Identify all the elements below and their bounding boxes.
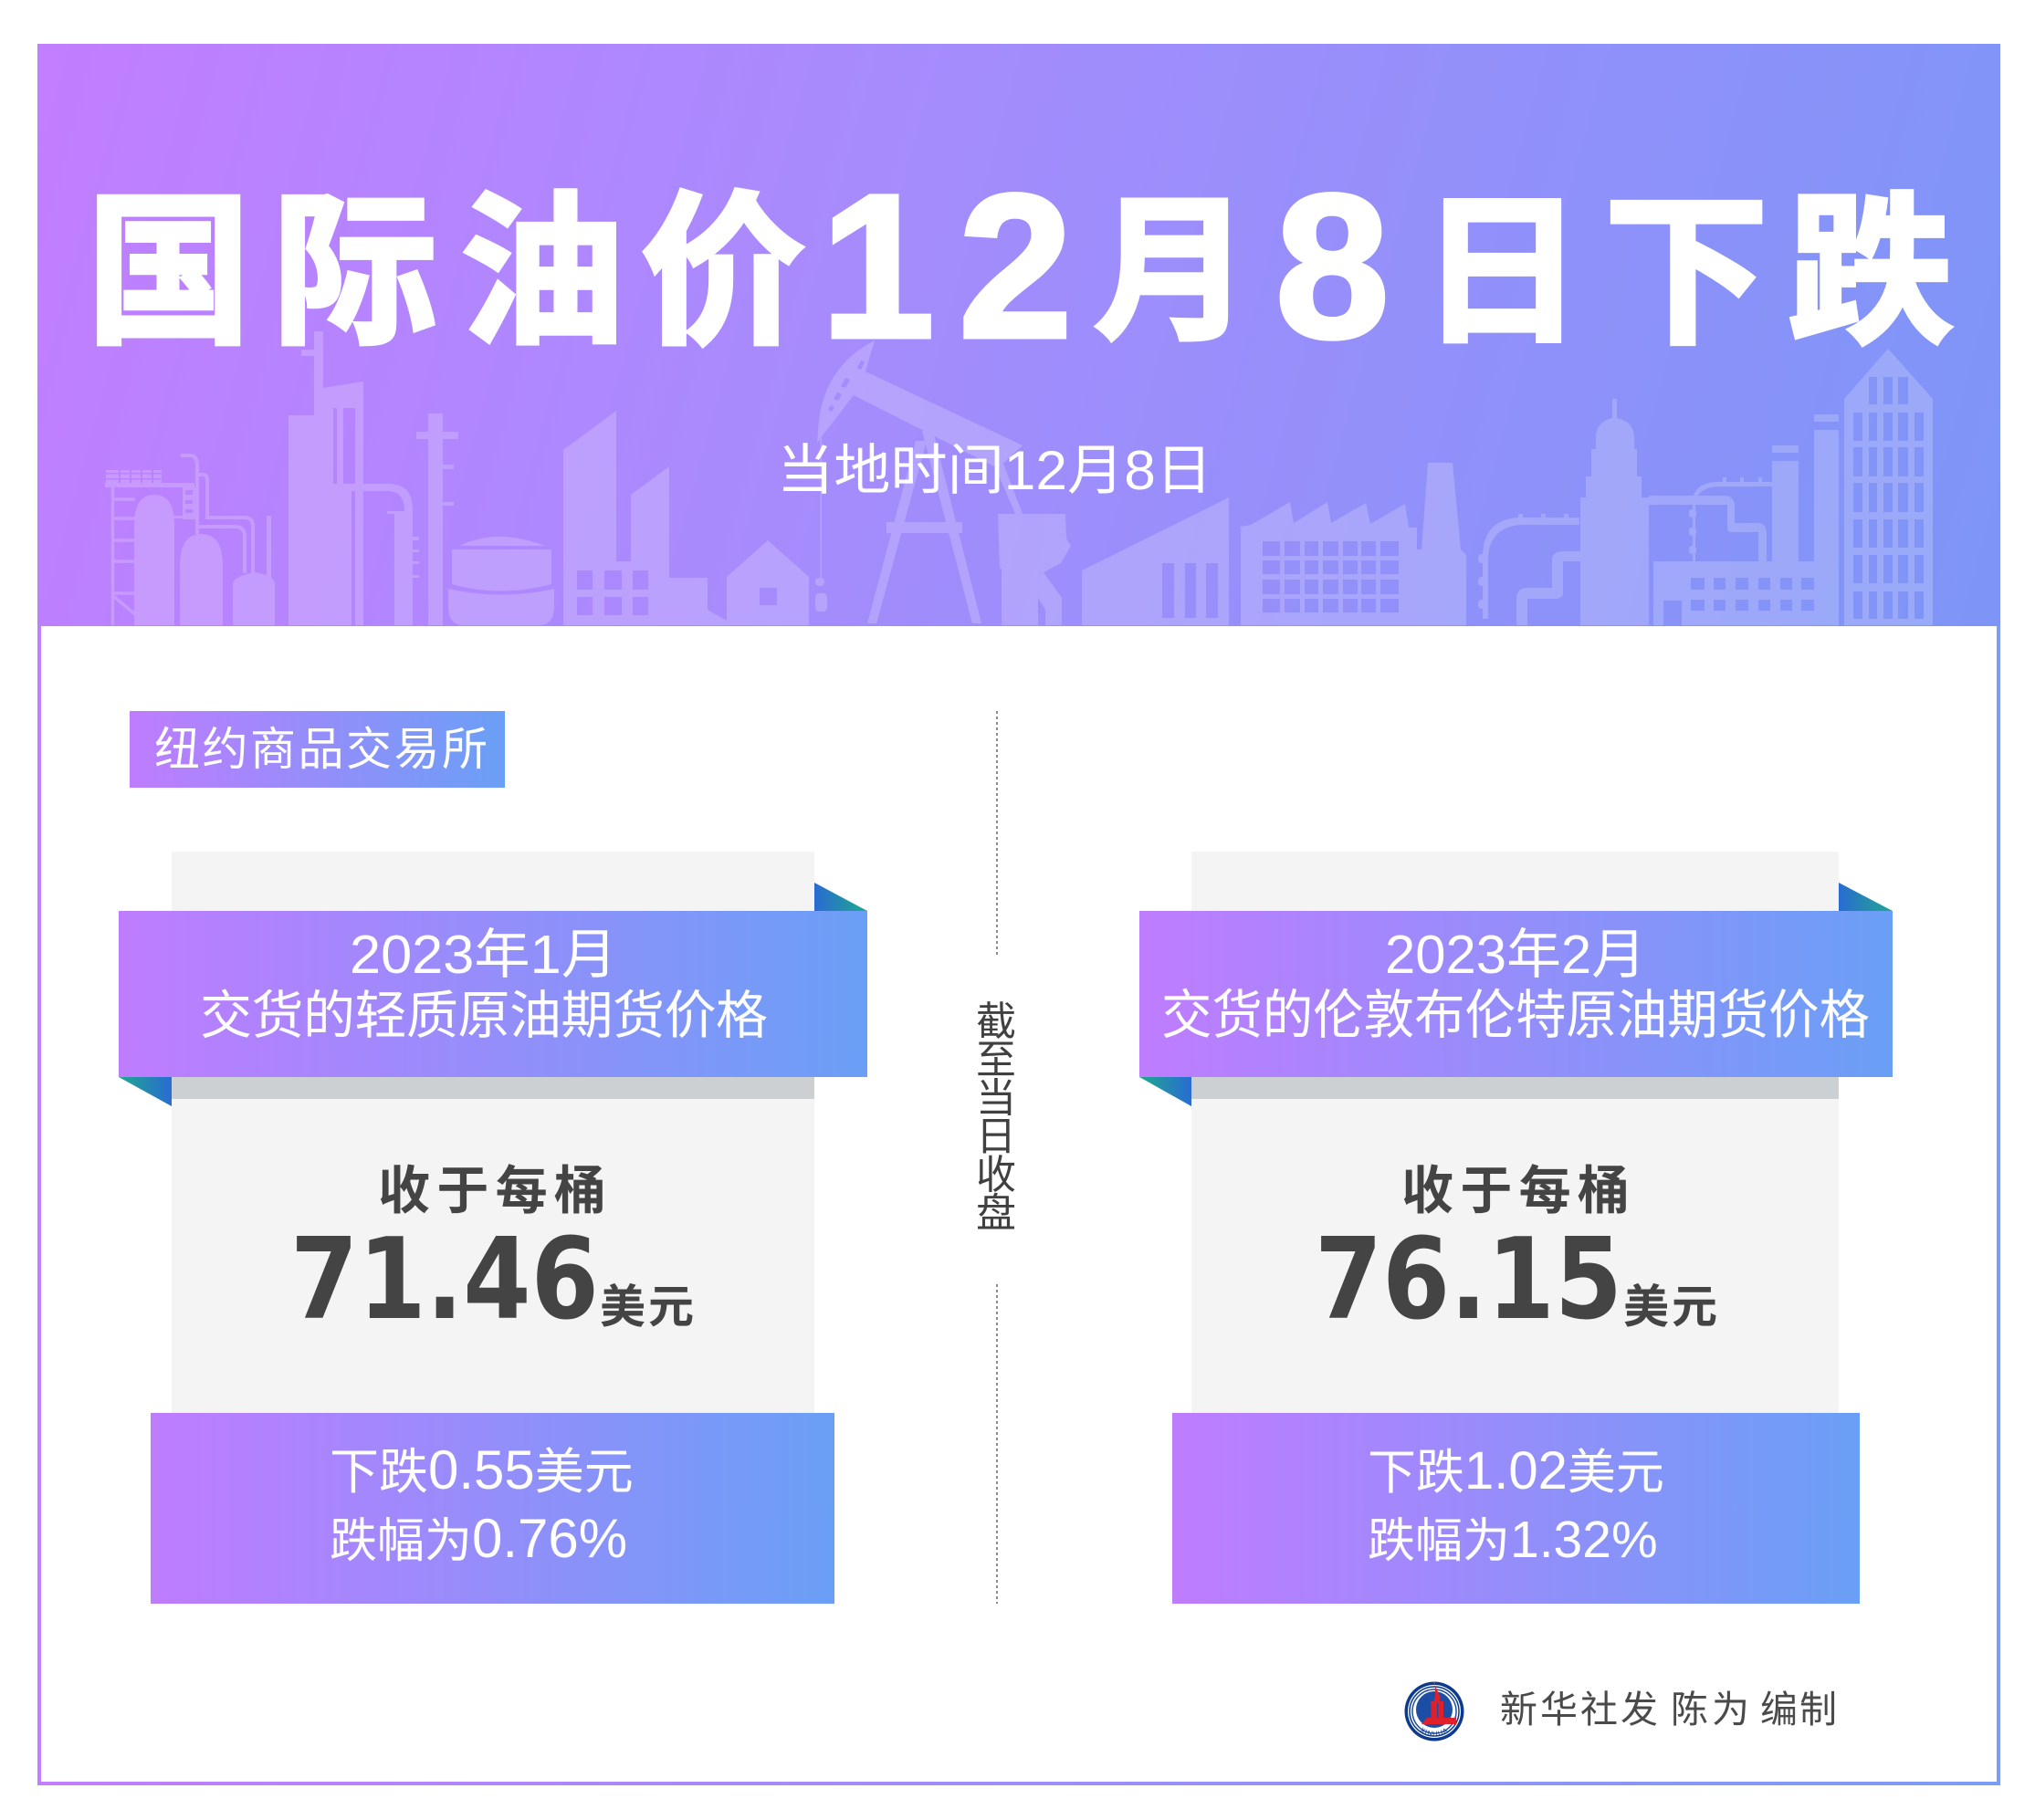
- ribbon heading: 交货的伦敦布伦特原油期货价格: [1161, 972, 1870, 1049]
- main title: 跌: [1788, 139, 1953, 377]
- industrial skyline silhouette: [105, 331, 1933, 625]
- price value: 71.46: [290, 1215, 599, 1345]
- price label: 收于每桶: [378, 1149, 606, 1224]
- price unit: 美元: [1623, 1271, 1717, 1336]
- change box: 跌幅为1.32%: [1368, 1511, 1658, 1569]
- main title: 2: [959, 152, 1073, 381]
- ribbon fold bottom left: [1139, 1077, 1191, 1106]
- panel: Brent crude: [1139, 852, 1893, 1604]
- main title: 日: [1421, 141, 1583, 376]
- main title: 下: [1604, 139, 1768, 377]
- change box: 下跌0.55美元: [330, 1439, 634, 1501]
- main title: 国: [87, 139, 251, 377]
- ribbon fold top right: [1839, 883, 1893, 911]
- main title: 1: [821, 152, 935, 381]
- ribbon fold top right: [814, 883, 867, 911]
- vertical label: 截至当日收盘: [976, 988, 1016, 1239]
- change box: 跌幅为0.76%: [330, 1508, 627, 1569]
- main title: 月: [1094, 143, 1251, 371]
- ribbon heading: 2023年1月: [350, 925, 617, 985]
- price unit: 美元: [600, 1271, 694, 1336]
- price label: 收于每桶: [1401, 1149, 1630, 1224]
- main title: 价: [641, 139, 805, 377]
- ribbon heading: [119, 911, 867, 1077]
- icon: Xinhua logo: [1404, 1681, 1464, 1742]
- subtitle: 当地时间12月8日: [777, 440, 1212, 501]
- price value: 76.15: [1315, 1215, 1622, 1345]
- main title: 8: [1275, 152, 1390, 381]
- ribbon heading: [1139, 911, 1893, 1077]
- icon: Xinhua logo: XINHUA: [1421, 1727, 1448, 1736]
- ribbon heading: 交货的轻质原油期货价格: [200, 974, 768, 1049]
- exchange tag: 纽约商品交易所: [154, 713, 488, 779]
- credit line: 新华社发陈为编制: [1500, 1679, 1837, 1733]
- header banner: [0, 44, 2035, 626]
- main title: 际: [273, 139, 437, 377]
- change box: 下跌1.02美元: [1368, 1441, 1664, 1501]
- change box: [1172, 1413, 1860, 1604]
- ribbon heading: 2023年2月: [1385, 925, 1646, 985]
- change box: [151, 1413, 834, 1604]
- main title: 油: [460, 139, 624, 377]
- panel: WTI crude: [119, 852, 867, 1604]
- ribbon fold bottom left: [119, 1077, 172, 1106]
